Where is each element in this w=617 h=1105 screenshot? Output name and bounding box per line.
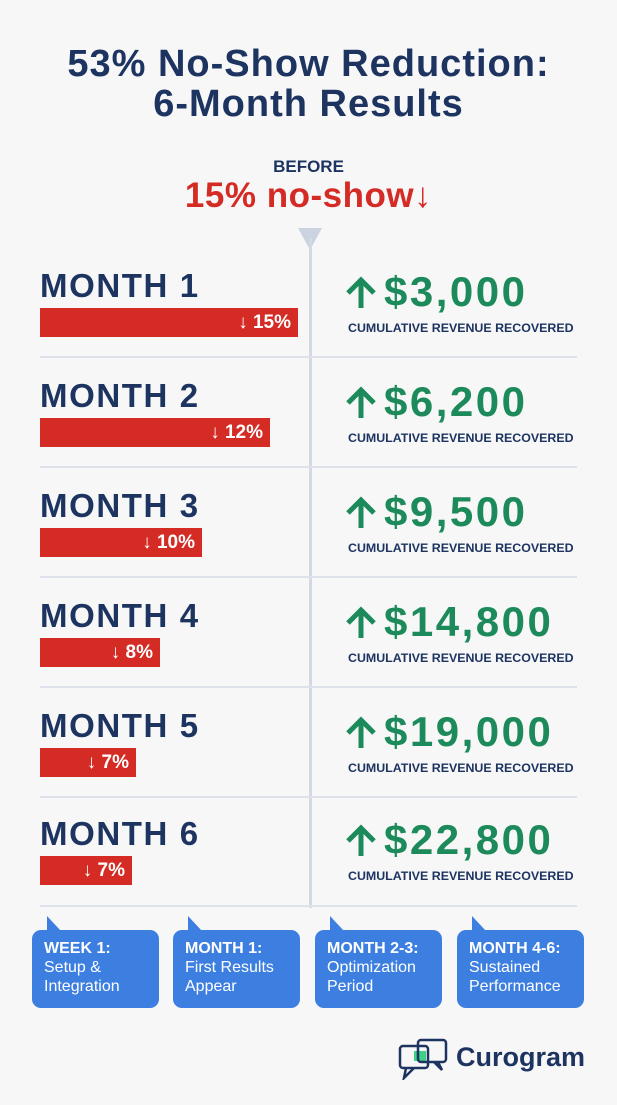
bubble: month 4-6: Sustained xyxy=(469,959,540,976)
month 2 xyxy=(40,377,574,447)
bubble: month 4-6: Performance xyxy=(469,978,561,995)
bubble: month 1: Appear xyxy=(185,978,237,995)
bubble: month 2-3: MONTH 2-3: xyxy=(327,940,419,957)
bubble: week 1: Setup & xyxy=(44,959,101,976)
before label: BEFORE xyxy=(273,157,344,176)
title: 6-Month Results xyxy=(153,83,464,125)
month 2: ↓ 12% xyxy=(210,422,263,443)
title: 53% No-Show Reduction: xyxy=(67,43,550,85)
month 4: $14,800 xyxy=(384,598,553,645)
month 5 xyxy=(40,707,574,777)
month 4: CUMULATIVE REVENUE RECOVERED xyxy=(348,651,574,665)
month 3: MONTH 3 xyxy=(40,487,200,524)
bubble: month 2-3 xyxy=(315,930,442,1008)
month 6 xyxy=(40,815,574,885)
bubble: month 2-3: Optimization xyxy=(327,959,416,976)
bubble: month 4-6 xyxy=(457,930,584,1008)
bubble: month 2-3: Period xyxy=(327,978,373,995)
month 6: MONTH 6 xyxy=(40,815,200,852)
month 3: CUMULATIVE REVENUE RECOVERED xyxy=(348,541,574,555)
month 1 xyxy=(40,267,574,337)
month 2: CUMULATIVE REVENUE RECOVERED xyxy=(348,431,574,445)
bubble: month 1 xyxy=(173,930,300,1008)
month 3 xyxy=(40,487,574,557)
month 1: ↓ 15% xyxy=(238,312,291,333)
bubble: week 1: Integration xyxy=(44,978,120,995)
month 5: CUMULATIVE REVENUE RECOVERED xyxy=(348,761,574,775)
bubble: month 1: First Results xyxy=(185,959,274,976)
bubble: week 1 xyxy=(32,930,159,1008)
logo xyxy=(398,1038,585,1080)
before value: 15% no-show↓ xyxy=(185,176,432,215)
logo: Curogram xyxy=(456,1042,585,1072)
month 1: CUMULATIVE REVENUE RECOVERED xyxy=(348,321,574,335)
month 6: CUMULATIVE REVENUE RECOVERED xyxy=(348,869,574,883)
month 3: $9,500 xyxy=(384,488,527,535)
month 4 xyxy=(40,597,574,667)
center timeline xyxy=(298,228,322,908)
month 2: $6,200 xyxy=(384,378,527,425)
month 1: $3,000 xyxy=(384,268,527,315)
month 6: ↓ 7% xyxy=(83,860,125,881)
month 5: $19,000 xyxy=(384,708,553,755)
title xyxy=(67,43,550,125)
month 5: ↓ 7% xyxy=(87,752,129,773)
bubble: week 1: WEEK 1: xyxy=(44,940,111,957)
month 1: MONTH 1 xyxy=(40,267,200,304)
month 2: MONTH 2 xyxy=(40,377,200,414)
bubble: month 1: MONTH 1: xyxy=(185,940,262,957)
month 5: MONTH 5 xyxy=(40,707,200,744)
month 4: ↓ 8% xyxy=(111,642,153,663)
month 3: ↓ 10% xyxy=(142,532,195,553)
month 6: $22,800 xyxy=(384,816,553,863)
bubble: month 4-6: MONTH 4-6: xyxy=(469,940,561,957)
month 4: MONTH 4 xyxy=(40,597,200,634)
